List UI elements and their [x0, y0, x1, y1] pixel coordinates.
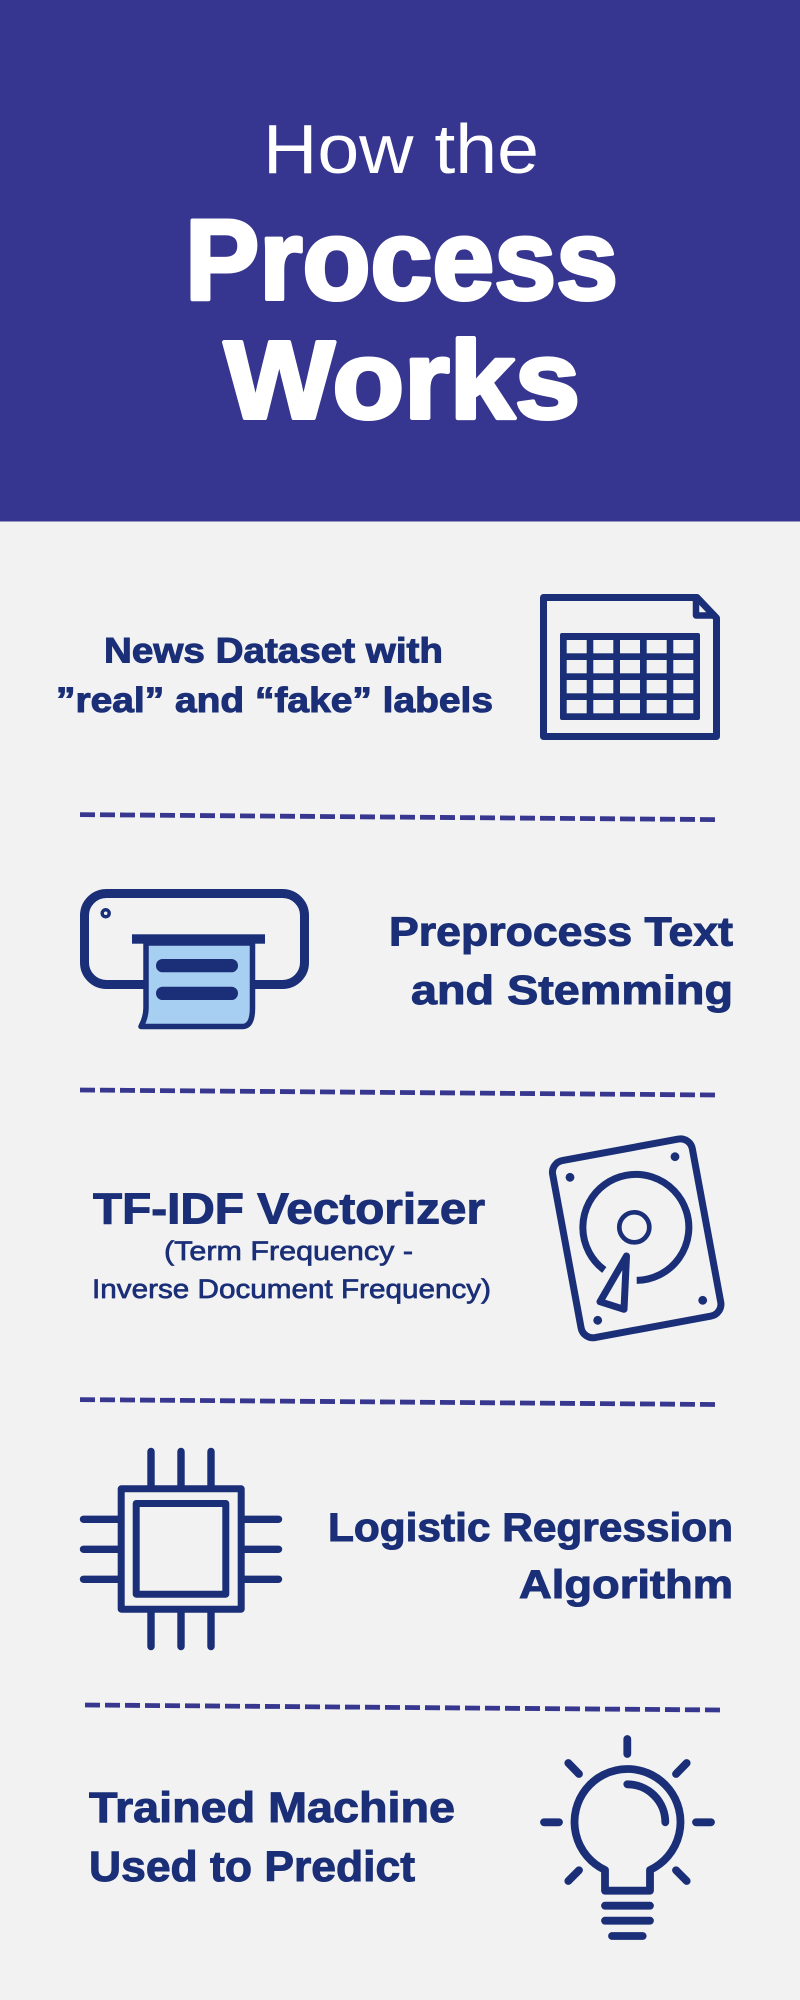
step 2 label: preprocess: [389, 909, 733, 1013]
step 4 label: logistic regression: [328, 1506, 733, 1607]
step 4 label: logistic regression: Algorithm: [519, 1563, 733, 1607]
icon: hard disk: [550, 1137, 723, 1340]
title: How the: [263, 110, 539, 188]
step 1 label: news dataset: News Dataset with: [104, 632, 443, 670]
step 2 label: preprocess: Preprocess Text: [389, 909, 733, 955]
step 4 label: logistic regression: Logistic Regression: [328, 1506, 733, 1550]
step 2 label: preprocess: and Stemming: [411, 967, 733, 1013]
step 5 label: trained machine: Used to Predict: [89, 1843, 415, 1891]
icon: microchip: [84, 1452, 278, 1646]
title: [185, 110, 618, 442]
step 3 label: TF-IDF vectorizer: TF-IDF Vectorizer: [93, 1184, 485, 1234]
icon: light bulb: [544, 1739, 711, 1936]
icon: printer with paper: [84, 894, 304, 1026]
title: Process: [185, 197, 618, 324]
step 1 label: news dataset: [56, 632, 493, 720]
step 1 label: news dataset: ”real” and “fake” labels: [56, 681, 493, 720]
title: Works: [224, 319, 580, 442]
step 3 label: TF-IDF vectorizer: Inverse Document Frequency): [92, 1274, 491, 1304]
panel: header banner: [0, 0, 800, 522]
icon: spreadsheet file: [544, 598, 716, 736]
step 5 label: trained machine: Trained Machine: [89, 1784, 455, 1832]
step 3 label: TF-IDF vectorizer: (Term Frequency -: [164, 1236, 413, 1266]
step 3 label: TF-IDF vectorizer: [92, 1184, 491, 1304]
step 5 label: trained machine: [89, 1784, 455, 1891]
